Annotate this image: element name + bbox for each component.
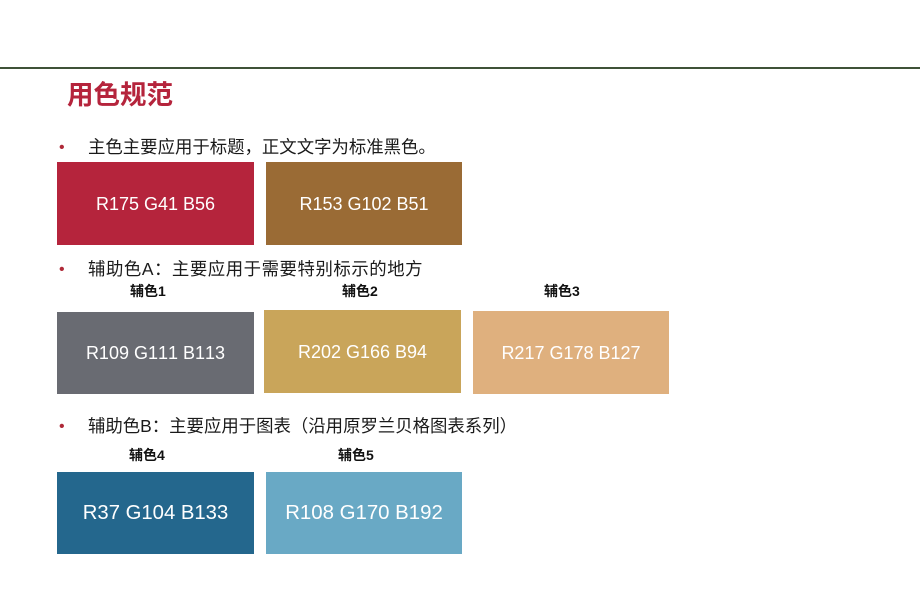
swatch: grey [57,312,254,394]
swatch: light blue: R108 G170 B192 [285,502,443,524]
swatch: primary red [57,162,254,245]
label: auxiliary 4: 辅色4 [129,447,165,463]
swatch: primary brown: R153 G102 B51 [299,194,429,214]
label: auxiliary 1: 辅色1 [130,283,166,299]
swatch: light blue [266,472,462,554]
label: auxiliary 2: 辅色2 [342,283,378,299]
swatch: dark blue [57,472,254,554]
text block: auxiliary A note: 辅助色A：主要应用于需要特别标示的地方 [88,259,423,279]
swatch: tan [473,311,669,394]
title: 用色规范 [67,80,173,110]
swatch: primary brown [266,162,462,245]
text block: primary colour note: 主色主要应用于标题，正文文字为标准黑色。 [88,137,436,157]
swatch: gold: R202 G166 B94 [298,342,427,362]
swatch: dark blue: R37 G104 B133 [83,502,228,524]
text block: auxiliary B note: 辅助色B：主要应用于图表（沿用原罗兰贝格图表系列） [88,416,517,436]
swatch: grey: R109 G111 B113 [86,343,225,363]
label: auxiliary 3: 辅色3 [544,283,580,299]
swatch: tan: R217 G178 B127 [501,342,641,362]
text: • [59,418,65,435]
swatch: gold [264,310,461,393]
label: auxiliary 5: 辅色5 [338,447,374,463]
swatch: primary red: R175 G41 B56 [96,194,215,214]
text: • [59,139,65,156]
text: • [59,261,65,278]
